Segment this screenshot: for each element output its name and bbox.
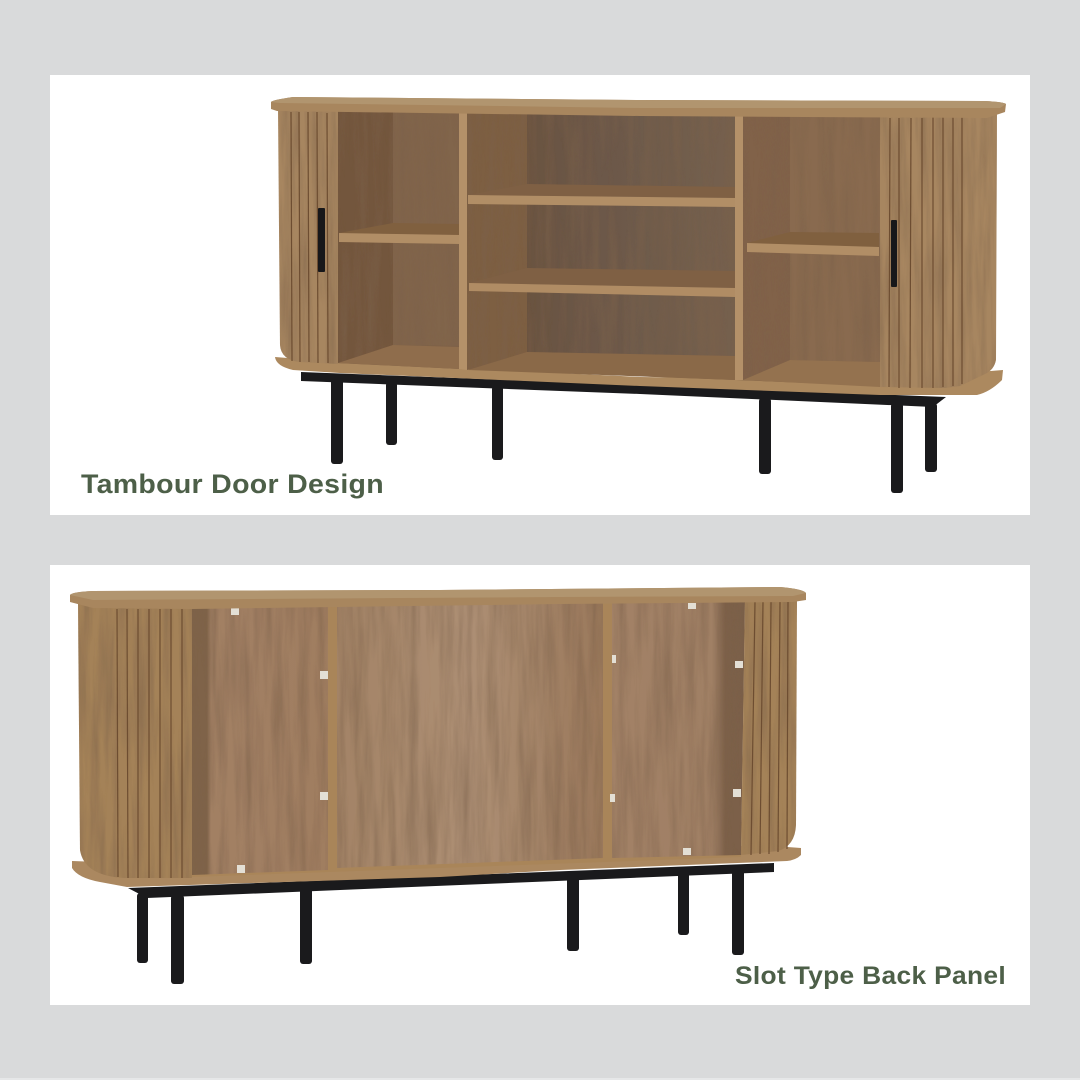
panel: tambour door design bbox=[50, 75, 1030, 515]
heading: tambour door design: Tambour Door Design bbox=[81, 469, 384, 499]
top slab bbox=[70, 587, 806, 609]
illustration: back of cabinet bbox=[70, 587, 806, 887]
base slab bbox=[275, 357, 1003, 395]
inner side walls bbox=[338, 110, 393, 363]
shelves bbox=[339, 223, 460, 235]
icon: front cabinet legs and rail bbox=[301, 372, 946, 493]
left door flutes bbox=[117, 609, 182, 878]
panel: slot type back panel bbox=[50, 565, 1030, 1005]
slot back panels bbox=[192, 598, 745, 875]
dividers bbox=[459, 112, 467, 370]
left tambour door bbox=[278, 109, 338, 364]
right door flutes bbox=[889, 116, 962, 388]
top slab bbox=[271, 97, 1006, 118]
icon: back cabinet legs and rail bbox=[128, 863, 774, 984]
base slab bbox=[72, 845, 801, 887]
right tambour door bbox=[880, 112, 997, 388]
cabinet backing bbox=[336, 110, 882, 386]
compartment floors bbox=[338, 345, 460, 369]
bottom edge line bbox=[0, 1078, 1080, 1080]
right tambour door bbox=[741, 598, 797, 855]
left door flutes bbox=[291, 112, 328, 363]
right door flutes bbox=[751, 602, 788, 855]
panel clips bbox=[231, 603, 743, 873]
door handles bbox=[318, 208, 325, 272]
illustration: open front cabinet bbox=[271, 97, 1006, 395]
interior back panels bbox=[338, 110, 880, 380]
heading: slot type back panel: Slot Type Back Panel bbox=[735, 962, 1006, 990]
back frame bbox=[192, 598, 745, 877]
left tambour door bbox=[78, 604, 192, 878]
